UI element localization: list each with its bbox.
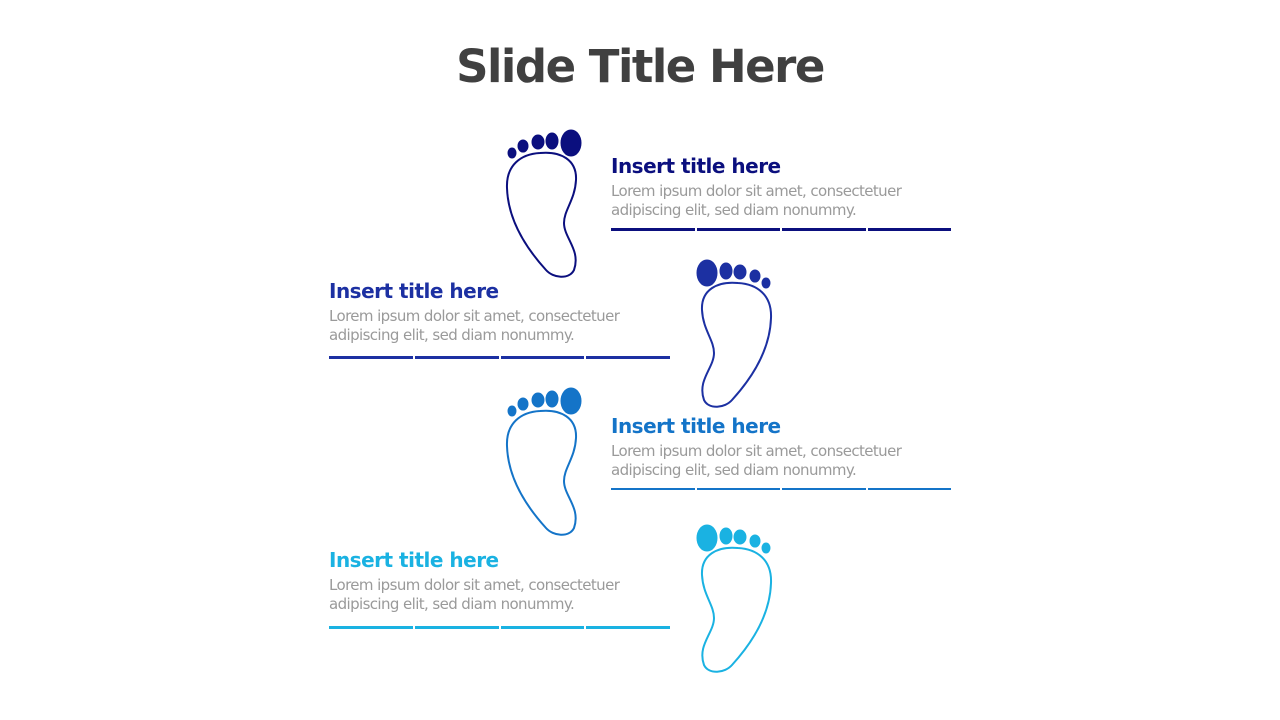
text block 2: [329, 279, 670, 359]
icon: footprint 4: [697, 525, 771, 672]
text block 2: Lorem ipsum dolor sit amet, consectetuer adipiscing elit, sed diam nonummy.: [329, 307, 619, 344]
text block 2: Insert title here: [329, 279, 499, 303]
text block 3: [611, 414, 951, 490]
icon: footprint 1: [507, 130, 581, 277]
text block 3: Lorem ipsum dolor sit amet, consectetuer adipiscing elit, sed diam nonummy.: [611, 442, 901, 479]
text block 1: Lorem ipsum dolor sit amet, consectetuer adipiscing elit, sed diam nonummy.: [611, 182, 901, 219]
text block 4: Lorem ipsum dolor sit amet, consectetuer adipiscing elit, sed diam nonummy.: [329, 576, 619, 613]
text block 4: Insert title here: [329, 548, 499, 572]
title: Slide Title Here: [456, 40, 824, 93]
text block 1: [611, 154, 951, 231]
icon: footprint 2: [697, 260, 771, 407]
text block 1: Insert title here: [611, 154, 781, 178]
icon: footprint 3: [507, 388, 581, 535]
text block 4: [329, 548, 670, 629]
text block 3: Insert title here: [611, 414, 781, 438]
